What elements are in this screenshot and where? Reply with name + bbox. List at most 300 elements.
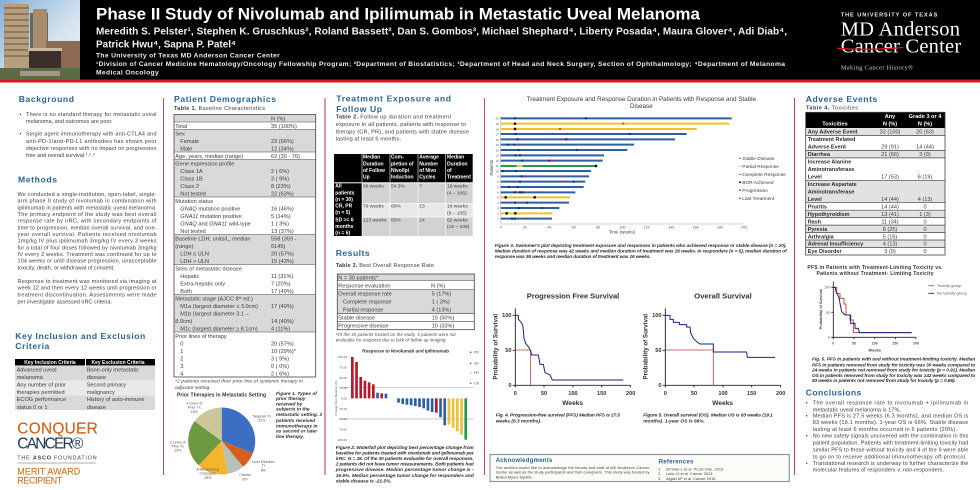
table: criteria: status 0 or 1 [17, 405, 47, 411]
heading: background: Background [19, 94, 74, 104]
methods text: treatment discontinuation. Assessments were made [18, 293, 156, 299]
swimmer chart: 40 [547, 226, 551, 230]
table 1: baseline characteristics: Sites of metastatic disease [175, 266, 242, 272]
acknowledgments text: Center as well as the study participants and their caregivers. This study was funded by [496, 470, 649, 475]
bullet list: background: melanoma, and outcomes are poor. [26, 119, 113, 125]
pie chart: prior therapies: 15% [204, 476, 212, 480]
panel: treatment exposure and follow up [334, 94, 473, 236]
table 1: baseline characteristics: GNA11 mutation positive [180, 214, 242, 220]
pie chart: prior therapies: Chemo [239, 473, 251, 477]
waterfall chart: -100.00 [337, 438, 347, 442]
swimmer chart: 4 [497, 201, 499, 205]
table 4: toxicities: Level [808, 197, 822, 203]
table 2: follow up and exposure: 7 [419, 184, 422, 190]
pie chart: prior therapies: Tx [261, 464, 265, 468]
methods text [16, 192, 157, 305]
table 1: baseline characteristics: 1 ( 3%) [271, 221, 289, 227]
chart title: toxicity PFS: Patients without Treatment- Limiting Toxicity [816, 271, 934, 277]
table 2: follow up and exposure [334, 154, 473, 236]
table 3: best overall response rate: 1 ( 3%) [432, 300, 450, 306]
swimmer chart: 80 [596, 226, 600, 230]
PFS Kaplan-Meier chart: 100 [502, 313, 512, 319]
table 4: toxicities: Treatment Related [808, 137, 855, 143]
waterfall chart: -50.00 [338, 417, 347, 421]
swimmer chart: 18 [495, 127, 499, 131]
table 4: toxicities: Any [885, 114, 896, 120]
conclusions list [806, 401, 969, 474]
swimmer chart: 19 [495, 122, 499, 126]
PFS Kaplan-Meier chart: 100 [568, 391, 578, 397]
panel: patient demographics [170, 94, 322, 482]
heading: treatment exposure [336, 94, 451, 114]
swimmer chart: 16 [495, 138, 499, 142]
table 3: best overall response rate: 15 (50%) [432, 316, 455, 322]
PFS Kaplan-Meier chart: 50 [505, 348, 512, 354]
pie chart: prior therapies: 2 Lines of [170, 440, 185, 444]
bullet list: background: • [20, 132, 22, 138]
table 1: baseline characteristics: Not tested [180, 229, 206, 235]
table 4: toxicities: 8 (25) [883, 227, 897, 233]
pie chart: prior therapies: 8% [261, 468, 267, 472]
table 2: follow up and exposure: Duration [363, 161, 384, 167]
waterfall chart: Change from Baseline (%) [334, 380, 338, 416]
figure 2 caption: irRC. N = 28. Of the 30 patients evaluable for overall responses, [336, 456, 474, 462]
affiliations: ¹Division of Cancer Medicine Hematology/Oncology Fellowship Program; ²Department of Biostatistics; ³Department of Head and Neck Surgery, Section of Ophthalmology; ⁴Department of Melanoma [96, 61, 785, 68]
panel: results [334, 248, 480, 485]
PFS Kaplan-Meier chart: 150 [597, 391, 606, 397]
table 1: baseline characteristics: 4 [180, 371, 183, 377]
toxicity PFS chart [819, 282, 968, 352]
table 4: toxicities: Rash [808, 219, 822, 225]
table 2 caption: lasting at least 6 months. [336, 137, 401, 143]
methods text: toxicity, death, or withdrawal of consent. [18, 265, 115, 271]
table 4: toxicities: Arthralgia [808, 234, 835, 240]
methods text: IV every 2 weeks. Treatment was continued for up to [18, 252, 156, 258]
table 3: best overall response rate: Response evaluation [338, 284, 391, 290]
swimmer chart: 1 [497, 216, 499, 220]
figure 5 toxicity caption: OS in patients removed from study for toxicity was 142 weeks compared to [812, 373, 975, 379]
table 1: baseline characteristics: 8.0cm) [175, 319, 193, 325]
table 2: follow up and exposure: of Nivo [419, 168, 436, 174]
table: criteria: Key Inclusion Criteria [24, 360, 76, 366]
swimmer legend: Complete Response [742, 172, 786, 178]
table 4: toxicities: 3 (9) [919, 152, 931, 158]
chart title: toxicity PFS: PFS in Patients with Treatment-Limiting Toxicity vs. [807, 265, 943, 271]
heading: conclusions: Conclusions [806, 388, 862, 398]
chart title: prior therapies: Prior Therapies In Metastatic Setting [177, 393, 266, 399]
toxicity PFS chart: Weeks [868, 348, 882, 352]
methods text: time to progression, median overall survival, and one- [18, 225, 157, 231]
figure 4 caption: Fig. 4. Progression-free survival (PFS) Median PFS is 27.5 [496, 413, 620, 419]
table 4: toxicities: 1 (3) [919, 212, 931, 218]
conclusions list: lasting at least 6 months occurred in 6 patients (20%). [813, 427, 957, 433]
pie chart: prior therapies: Conjugate [200, 472, 216, 476]
table 4: toxicities: 4 (13) [918, 197, 932, 203]
table 2: follow up and exposure: of [447, 168, 452, 174]
table 4: toxicities: 3 (9) [884, 249, 896, 255]
table 1: baseline characteristics: 17 (49%) [271, 289, 294, 295]
table 1: baseline characteristics: 12 (34%) [271, 146, 294, 152]
table 1: baseline characteristics: 16 (46%) [271, 206, 294, 212]
waterfall chart: 75.00 [339, 366, 347, 370]
swimmer chart: 100 [620, 226, 626, 230]
table 3: best overall response rate: 10 (33%) [432, 324, 455, 330]
table 1: baseline characteristics: Male [180, 146, 192, 152]
table 1: baseline characteristics: th [239, 296, 242, 300]
authors: Patrick Hwu⁴, Sapna P. Patel⁴ [96, 40, 236, 51]
swimmer chart: 180 [717, 226, 723, 230]
pie chart: prior therapies: Prior Tx [171, 444, 184, 448]
Conquer Cancer merit award logo: CONQUER [17, 420, 98, 437]
table 1: baseline characteristics: 62 (30 - 76) [271, 154, 300, 160]
table: criteria: Bone-only metastatic [87, 368, 139, 374]
table 4: toxicities: Aminotransferase [808, 190, 854, 196]
table 1: baseline characteristics: 0 [180, 341, 183, 347]
figure 1 caption: subjects in the [276, 407, 310, 413]
swimmer chart: 20 [523, 226, 527, 230]
table 1: baseline characteristics: 3 ( 9%) [271, 356, 289, 362]
table 1: baseline characteristics: LDH ≤ ULN [180, 251, 209, 257]
bullet list: background [20, 112, 157, 159]
figure 2 caption: baseline for patients treated with nivolumab and ipilimumab per [336, 451, 475, 457]
toxicity PFS chart: 0 [832, 342, 834, 346]
table 3: best overall response rate: N (%) [431, 284, 445, 290]
figure 5 toxicity caption: Fig. 5. PFS in patients with and without treatment-limiting toxicity. Median [812, 356, 975, 362]
conclusions list: Translational research is underway to further characterize the [813, 461, 968, 467]
OS Kaplan-Meier chart: Weeks [712, 400, 733, 407]
figure 5 toxicity caption: 83 weeks in patients not removed from study for toxicity (p = 0.66). [812, 378, 956, 384]
table 4: toxicities: 11 (34) [881, 219, 899, 225]
table: criteria: melanoma [17, 375, 44, 381]
table 4: toxicities: 4 (13) [883, 242, 897, 248]
bullet list: background: objective responses with no impact on progression [26, 146, 156, 152]
table 1: baseline characteristics: 35 (100%) [271, 124, 297, 130]
table 2: follow up and exposure: 16 weeks [447, 184, 468, 190]
acknowledgments text [496, 465, 650, 479]
table 1: baseline characteristics: Female [180, 139, 199, 145]
table 2: follow up and exposure: Induction [391, 175, 414, 181]
table 2: follow up and exposure: 16 weeks [447, 203, 468, 209]
methods text: year overall survival. Patients received nivolumab [18, 232, 156, 238]
table 2: follow up and exposure: pletion of [391, 161, 414, 167]
table 4: toxicities: 0 [923, 234, 927, 240]
Conquer Cancer merit award logo: THE ASCO FOUNDATION [17, 456, 97, 462]
panel: swimmer plot [489, 96, 787, 260]
PFS Kaplan-Meier chart: 0 [508, 383, 512, 389]
bullet list: background: There is no standard therapy for metastatic uveal [26, 112, 156, 118]
table 3: best overall response rate: Progressive disease [338, 324, 389, 330]
table 1: baseline characteristics: 5 (14%) [271, 214, 291, 220]
heading: treatment exposure: Treatment Exposure and [336, 94, 451, 104]
chart title: OS: Overall Survival [694, 292, 752, 301]
acknowledgments text: The authors would like to acknowledge the faculty and staff at MD Anderson Cancer [496, 465, 650, 470]
references list: 2. [658, 471, 661, 476]
toxicity PFS chart: Probability of Survival [819, 289, 823, 329]
swimmer legend: BOR Achieved [742, 180, 774, 186]
table 4: toxicities: 0 [923, 249, 927, 255]
table 1: baseline characteristics: N (%) [271, 116, 285, 122]
table 2: follow up and exposure: CR, PR [335, 203, 353, 209]
swimmer chart: 10 [495, 169, 499, 173]
table 2: follow up and exposure: of Follow [363, 168, 385, 174]
panel: inclusion and exclusion criteria [15, 331, 155, 486]
PFS Kaplan-Meier chart: 200 [626, 391, 635, 397]
table 2: follow up and exposure: (9 – 105) [447, 210, 467, 216]
table 3: best overall response rate: Complete response [343, 300, 392, 306]
table 4: toxicities [806, 112, 945, 255]
bullet list: background: Single agent immunotherapy with anti-CTLA4 and [26, 132, 156, 138]
figure 1 caption: received by [276, 401, 303, 407]
waterfall legend [470, 351, 480, 386]
heading: references: References [659, 460, 694, 466]
table: criteria: therapies permitted [17, 390, 65, 396]
table 1: baseline characteristics: 7 (20%) [271, 281, 291, 287]
table 1: baseline characteristics: Sex [175, 131, 185, 137]
swimmer chart: 0 [500, 226, 502, 230]
conclusions list: The overall response rate to nivolumab + ipilimumab in [813, 401, 968, 407]
table 2: follow up and exposure: months [335, 224, 354, 230]
table 4: toxicities: 0 [923, 242, 927, 248]
figure 3 caption [495, 243, 787, 260]
figure 5 toxicity caption: 24 weeks in patients not removed from study for toxicity (p = 0.91). Median [811, 368, 975, 374]
swimmer chart: 20 [495, 116, 499, 120]
swimmer legend: Progression [742, 188, 768, 194]
chart title: PFS: Progression Free Survival [527, 292, 619, 301]
table 1: baseline characteristics: 20 (57%) [271, 251, 294, 257]
table 1: baseline characteristics [174, 114, 316, 377]
waterfall legend: PD [474, 351, 479, 355]
conclusions list: metastatic uveal melanoma is 17%. [813, 407, 901, 413]
table 4: toxicities: N (%) [918, 122, 932, 128]
table 1: baseline characteristics: Class 2 [180, 184, 199, 190]
PFS Kaplan-Meier chart [492, 308, 635, 407]
table 3: best overall response rate: 4 (13%) [432, 308, 451, 314]
table 3 footnote: *Of the 35 patients treated on the study, 5 patients were not [336, 332, 457, 337]
conclusions list: 83 weeks (19.1 months). 1-year OS is 66%. Stable disease [813, 420, 968, 426]
references list: Luke JJ et al. Cancer 2013. [666, 471, 713, 476]
table 1: baseline characteristics: Prior lines of therapy [175, 334, 227, 340]
swimmer chart: 3 [497, 206, 499, 210]
methods text: 1mg/kg IV plus ipilimumab 3mg/kg IV every 3 weeks [18, 239, 157, 245]
table 2: follow up and exposure: Nivo/Ipi [391, 168, 410, 174]
swimmer chart: 12 [495, 159, 499, 163]
table 4: toxicities: 14 (44) [881, 197, 899, 203]
methods text: for a total of four doses followed by nivolumab 3mg/kg [18, 245, 156, 251]
table 3: best overall response rate: 5 (17%) [432, 292, 451, 298]
OS Kaplan-Meier chart: 50 [655, 348, 662, 354]
pie chart: prior therapies: Targeted Tx [252, 414, 271, 418]
bullet list: background: • [20, 112, 22, 118]
table 1: baseline characteristics: 558 (359 - [271, 236, 297, 242]
table 4: toxicities: 17 (53) [881, 174, 899, 180]
figure 1 caption: prior therapy [275, 396, 306, 402]
table: criteria [15, 359, 155, 411]
table: criteria: Any number of prior [17, 382, 66, 388]
table 1: baseline characteristics: LDH > ULN [180, 259, 209, 265]
table: criteria: malignancy [87, 390, 115, 396]
table 4: toxicities: 6 (19) [918, 174, 932, 180]
table 2: follow up and exposure: SD >= 6 [335, 217, 354, 223]
toxicity PFS chart: 100 [872, 342, 878, 346]
MD Anderson logo: Cancer Center [841, 36, 961, 58]
chart title: toxicity PFS [807, 265, 943, 277]
table 4: toxicities: Toxicities [822, 122, 848, 128]
heading: results: Results [336, 248, 370, 258]
waterfall legend: SD [474, 362, 479, 366]
conclusions list: • [806, 434, 808, 440]
table 1: baseline characteristics: 3 [180, 364, 183, 370]
table 4: toxicities: Aminotransferase [808, 167, 854, 173]
swimmer chart: Patients [489, 159, 494, 176]
table 4: toxicities: 14 (44) [881, 204, 899, 210]
heading: key inclusion and exclusion criteria: Key Inclusion and Exclusion [15, 331, 145, 341]
figure 1 caption: line therapy. [276, 434, 304, 440]
table 1: baseline characteristics: 2 ( 6%) [271, 169, 289, 175]
table 1: baseline characteristics: Class 1B [180, 176, 203, 182]
heading: patient demographics: Patient Demographics [174, 94, 276, 104]
swimmer chart: 8 [497, 180, 499, 184]
figure 2 caption: progressive disease. Median percentage tumor change is - [335, 467, 474, 473]
conclusions list: • [806, 413, 808, 419]
OS Kaplan-Meier chart: 200 [776, 391, 785, 397]
heading: adverse events: Adverse Events [806, 94, 878, 104]
table 1: baseline characteristics: 0 ( 0%) [271, 364, 289, 370]
waterfall chart: -75.00 [338, 428, 347, 432]
references list: 1. [658, 466, 661, 471]
figure 5 toxicity caption [811, 356, 975, 384]
table 2 caption: exposure in all patients, patients with response to [336, 122, 466, 128]
figure 3 caption: Median duration of response was 42 weeks and median duration of treatment was 26 weeks. In responders (n = 5), median duration of [495, 248, 787, 254]
table 2: follow up and exposure: (n = 30) [335, 197, 353, 203]
table 3 footnote [336, 332, 457, 343]
methods text: week 12 and then every 12 weeks until progression or [16, 286, 157, 292]
OS Kaplan-Meier chart: 50 [691, 391, 697, 397]
OS Kaplan-Meier chart: 100 [652, 313, 662, 319]
table: criteria: History of auto-immune [87, 397, 145, 403]
table 4: toxicities: Pyrexia [808, 227, 828, 233]
table 1: baseline characteristics: 2 ( 6%) [271, 371, 289, 377]
table 1: baseline characteristics: Age, years, median (range) [175, 154, 243, 160]
table 3: best overall response rate: N = 30 patients* [338, 275, 379, 281]
OS Kaplan-Meier chart: 0 [664, 391, 667, 397]
table 1: baseline characteristics: GNAQ and GNA11 wild-type [180, 221, 251, 227]
table 1: baseline characteristics: 4 (11%) [271, 326, 290, 332]
conclusions list: • [806, 401, 808, 407]
toxicity chart legend: Toxicity group [937, 283, 962, 288]
chart title: swimmer plot: Treatment Exposure and Response Duration in Patients with Response and Stable [527, 96, 756, 103]
table 1: baseline characteristics: Gene expression profile [175, 161, 234, 167]
swimmer chart [489, 116, 786, 234]
table 1: baseline characteristics: 13 (37%) [271, 229, 294, 235]
swimmer chart: 7 [497, 185, 499, 189]
swimmer chart: 11 [496, 164, 499, 168]
table 4: toxicities: 0 [923, 219, 927, 225]
figure 5 caption: months). 1-year OS is 66%. [643, 418, 705, 424]
table 2: follow up and exposure: 13 [419, 203, 425, 209]
table 2: follow up and exposure: Median [363, 155, 380, 161]
authors [96, 26, 787, 51]
table 2: follow up and exposure: (n = 6) [335, 230, 350, 236]
table 2: follow up and exposure: (4 – 106) [447, 190, 467, 196]
table 1: baseline characteristics: ed.) [242, 296, 253, 302]
table 1: baseline characteristics: M1b (largest diameter 3.1 – [180, 311, 250, 317]
waterfall chart: 0.00 [341, 396, 347, 400]
table 4: toxicities: Adverse Event [808, 145, 846, 151]
table 1: baseline characteristics: 10 (29%)* [271, 349, 297, 355]
swimmer chart: 120 [644, 226, 650, 230]
toxicity chart legend [928, 283, 968, 296]
table 2 caption: Table 2. Follow up duration and treatment [336, 114, 451, 120]
waterfall legend: PR [474, 371, 479, 375]
swimmer chart: Time (weeks) [609, 229, 636, 234]
table 4: toxicities: 20 (63) [916, 130, 934, 136]
heading: treatment exposure: Follow Up [336, 104, 382, 114]
panel: background [19, 94, 157, 159]
table 1: baseline characteristics: M1a (largest diameter ≤ 3.0cm) [180, 304, 258, 310]
table 2: follow up and exposure: Up [363, 175, 370, 181]
table 4: toxicities: Hypothyroidism [808, 212, 850, 218]
PFS Kaplan-Meier chart: Weeks [562, 400, 583, 407]
table 1: baseline characteristics: 15 (43%) [271, 259, 294, 265]
waterfall chart: 50.00 [339, 376, 347, 380]
table 2 caption [336, 114, 469, 143]
waterfall chart: 100.00 [338, 355, 347, 359]
heading: key inclusion and exclusion criteria: Criteria [15, 341, 50, 351]
table 1: baseline characteristics: Not tested [180, 191, 206, 197]
table 2: follow up and exposure: (n = 5) [335, 210, 350, 216]
table 1: baseline characteristics: Total [175, 124, 187, 130]
swimmer chart: 17 [495, 132, 499, 136]
table 1: baseline characteristics: Hepatic [180, 274, 199, 280]
waterfall chart [334, 351, 480, 442]
figure 1 caption: immunotherapy in [276, 423, 318, 429]
methods text: ipilimumab in patients with metastatic uveal melanoma. [18, 205, 157, 211]
table 2: follow up and exposure: 54.3% [391, 184, 406, 190]
pie chart: prior therapies: 8% [242, 478, 248, 482]
pie chart: prior therapies: 31% [258, 418, 266, 422]
table 1: baseline characteristics: 14 (40%) [271, 319, 294, 325]
heading: acknowledgments: Acknowledgments [496, 458, 553, 464]
table 1: baseline characteristics: Class 1A [180, 169, 203, 175]
chart title: swimmer plot: Disease [630, 103, 653, 110]
header photo of hospital buildings [0, 0, 80, 80]
table 2: follow up and exposure: 83% [391, 217, 401, 223]
table 1: baseline characteristics: GNAQ mutation positive [180, 206, 240, 212]
panel: methods [16, 175, 157, 305]
table 2: follow up and exposure: Average [419, 155, 439, 161]
table 4: toxicities: 29 (91) [881, 145, 899, 151]
header banner [0, 0, 980, 82]
table 2: follow up and exposure: Number [419, 161, 438, 167]
figure 1 caption: as second or later [276, 429, 318, 435]
table 3 footnote: evaluable for response due to lack of follow-up imaging. [336, 338, 447, 343]
table 1: baseline characteristics: Extra-hepatic only [180, 281, 225, 287]
figure 2 caption: stable disease is -21.5%. [336, 479, 392, 485]
chart title: swimmer plot [527, 96, 756, 110]
swimmer chart: 200 [741, 226, 747, 230]
toxicity PFS chart: 0 [828, 336, 830, 340]
swimmer chart: 140 [668, 226, 674, 230]
figure 1 caption: metastatic setting. 2 [276, 412, 322, 418]
pie chart: prior therapies: 15% [191, 410, 199, 414]
table 4: toxicities: Pruritis [808, 204, 827, 210]
table 2: follow up and exposure: 24 [419, 217, 425, 223]
conclusions list: molecular features of responders v. non-responders. [813, 468, 944, 474]
MD Anderson logo: Making Cancer History® [841, 64, 913, 71]
table 1: baseline characteristics: Metastatic stage (AJCC 8 [175, 296, 239, 302]
table: criteria: disease [87, 375, 106, 381]
panel: progression free survival [492, 292, 635, 424]
